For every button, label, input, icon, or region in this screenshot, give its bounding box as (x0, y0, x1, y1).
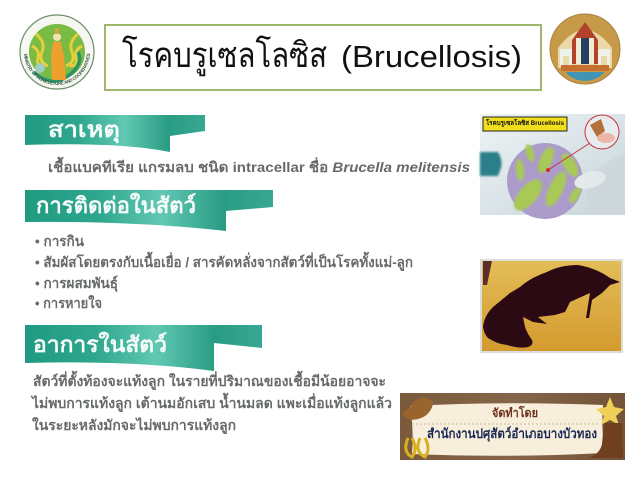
panel: transmission heading ribbon (25, 190, 273, 231)
list: transmission routes: • การหายใจ (35, 294, 102, 311)
banner text: organised by: จัดทำโดย (492, 405, 538, 420)
icon: horseshoes (406, 438, 428, 457)
title box (105, 25, 541, 90)
title: (Brucellosis) (341, 39, 522, 74)
image: aborted fetus (481, 260, 622, 352)
heading: symptoms: อาการในสัตว์ (33, 331, 167, 357)
image label: โรคบรูเซลโลซิส Brucellosis (485, 118, 564, 128)
icon: star badge (596, 397, 624, 425)
icon: livestock department seal (550, 14, 620, 84)
heading: transmission: การติดต่อในสัตว์ (36, 192, 196, 218)
list: transmission routes: • การกิน (35, 233, 84, 249)
icon: hat (402, 398, 433, 420)
list: transmission routes: • การผสมพันธุ์ (35, 275, 118, 292)
banner: organised by (400, 393, 625, 460)
text: symptoms description: สัตว์ที่ตั้งท้องจะแท้งลูก ในรายที่ปริมาณของเชื้อมีน้อยอาจจะ (33, 370, 386, 390)
image label (483, 117, 567, 131)
text: symptoms description: ไม่พบการแท้งลูก เต้านมอักเสบ น้ำนมลด แพะเมื่อแท้งลูกแล้ว (30, 392, 392, 412)
title: โรคบรูเซลโลซิส (122, 35, 327, 76)
title (122, 35, 522, 76)
image: bacteria petri dish (480, 114, 625, 219)
banner text: office name: สำนักงานปศุสัตว์อำเภอบางบัวทอง (427, 426, 597, 442)
list: transmission routes (35, 233, 413, 311)
panel: symptoms heading ribbon (25, 325, 262, 371)
panel: cause heading ribbon (25, 115, 205, 152)
icon: ministry of agriculture seal (19, 14, 95, 90)
text: cause description: เชื้อแบคทีเรีย แกรมลบ ชนิด intracellar ชื่อ Brucella melitensis (48, 156, 470, 175)
heading: cause: สาเหตุ (48, 117, 120, 144)
icon: boots (588, 423, 623, 458)
text: symptoms description: ในระยะหลังมักจะไม่พบการแท้งลูก (32, 416, 236, 434)
icon: ministry of agriculture seal: MINISTRY OF AGRICULTURE AND COOPERATIVES (24, 54, 90, 86)
text: symptoms description (30, 370, 392, 434)
list: transmission routes: • สัมผัสโดยตรงกับเนื้อเยื่อ / สารคัดหลั่งจากสัตว์ที่เป็นโรคทั้งแม่-ลูก (35, 251, 413, 271)
